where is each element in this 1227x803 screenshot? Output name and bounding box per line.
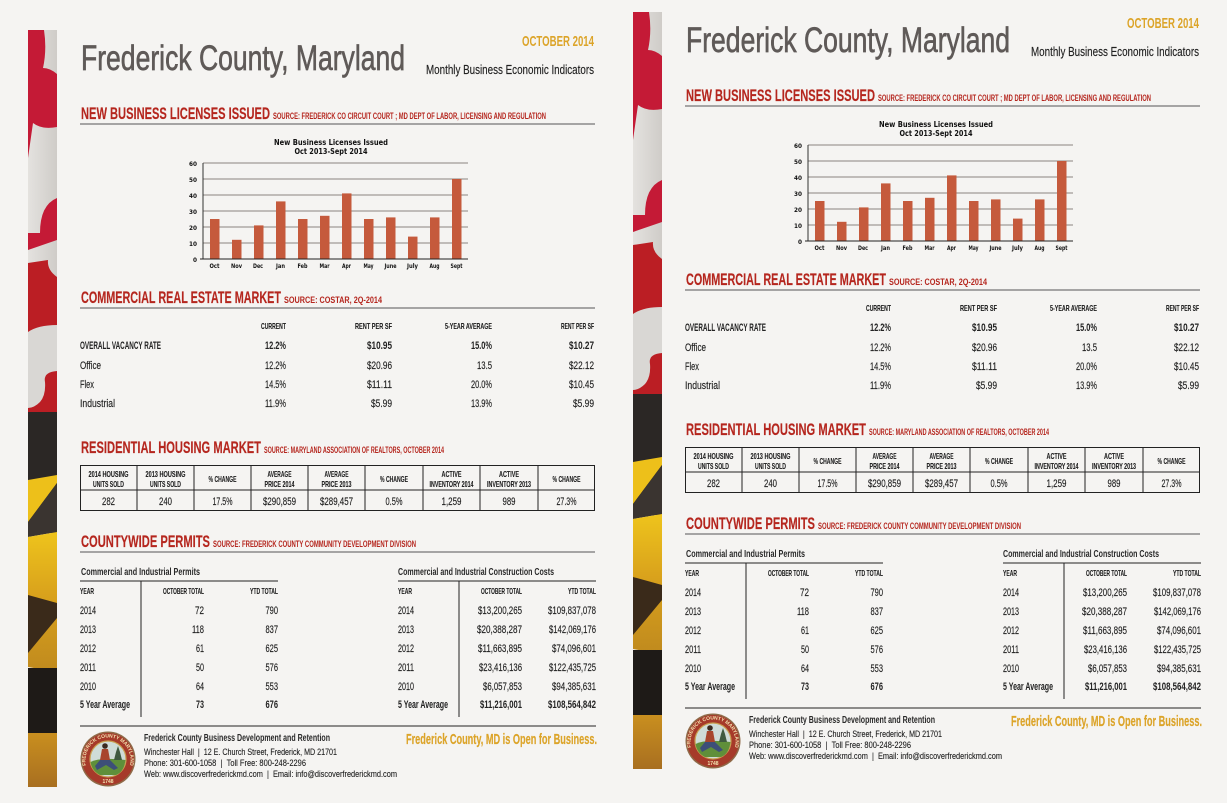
construction costs table: YTD TOTAL [568,586,596,596]
permits table: YTD TOTAL [855,568,883,578]
commercial real estate table [685,303,1199,392]
residential housing table: 17.5% [212,496,233,508]
permits table: 625 [266,643,278,655]
commercial real estate table: 11.9% [870,380,891,392]
residential housing table: AVERAGE [930,451,954,461]
footer contact details: Web: www.discoverfrederickmd.com | Email: info@discoverfrederickmd.com [749,751,1002,762]
bar chart: new business licenses: July [406,263,418,270]
construction costs table: $11,663,895 [1083,625,1127,637]
bar chart: new business licenses: 40 [794,174,802,182]
commercial real estate table: 13.5 [477,360,492,372]
permits table: 2013 [685,606,701,618]
bar chart: new business licenses: June [989,245,1002,252]
commercial real estate table: OVERALL VACANCY RATE [685,322,766,334]
bar chart: new business licenses: Aug [430,263,440,270]
icon: county seal [686,714,740,768]
construction costs table: $108,564,842 [548,699,596,711]
section heading: residential housing: RESIDENTIAL HOUSING MARKET [81,438,261,457]
bar chart: new business licenses: Oct 2013-Sept 2014 [900,129,972,138]
subtitle: Monthly Business Economic Indicators [426,62,594,77]
permits table: OCTOBER TOTAL [163,586,204,596]
construction costs table: $11,663,895 [478,643,522,655]
permits table: 5 Year Average [685,681,735,693]
residential housing table: % CHANGE [1158,456,1186,466]
commercial real estate table: 12.2% [870,342,891,354]
construction costs table: $109,837,078 [1153,587,1201,599]
residential housing table: 282 [707,478,720,490]
bar chart: new business licenses: Apr [342,263,351,270]
construction costs table: $20,388,287 [1082,606,1127,618]
residential housing table: 2013 HOUSING [750,451,791,461]
bar chart: new business licenses: Jan [275,263,285,270]
construction costs table: $13,200,265 [478,605,522,617]
commercial real estate table: $10.95 [367,340,392,352]
commercial real estate table: Office [685,342,706,354]
bar chart: new business licenses: Feb [298,263,308,270]
permits table: 2011 [80,662,96,674]
construction costs table: $94,385,631 [1157,663,1201,675]
residential housing table: 2014 HOUSING [694,451,734,461]
bar chart: new business licenses: New Business Licenses Issued [879,120,993,129]
footer contact details: Phone: 301-600-1058 | Toll Free: 800-248-2296 [749,740,911,751]
construction costs table: $11,216,001 [480,699,522,711]
section heading: residential housing: SOURCE: MARYLAND ASSOCIATION OF REALTORS, OCTOBER 2014 [264,445,444,456]
residential housing table: % CHANGE [814,456,842,466]
permits table: YEAR [685,568,699,578]
bar chart: new business licenses: Jan [880,245,890,252]
section heading: countywide permits [685,514,1200,534]
commercial real estate table: 20.0% [1076,361,1097,373]
residential housing table: PRICE 2013 [926,461,957,471]
residential housing table: PRICE 2014 [264,479,295,489]
commercial real estate table: 5-YEAR AVERAGE [445,321,492,331]
commercial real estate table: OVERALL VACANCY RATE [80,340,161,352]
commercial real estate table [80,321,594,410]
residential housing table: 1,259 [1046,478,1066,490]
residential housing table: % CHANGE [380,474,408,484]
commercial real estate table: $22.12 [569,360,594,372]
residential housing table: $289,457 [925,478,958,490]
commercial real estate table: 15.0% [471,340,492,352]
construction costs table: $142,069,176 [1154,606,1201,618]
icon: county seal [80,732,136,786]
bar chart: new business licenses: Mar [320,263,330,270]
bar chart: new business licenses: Mar [924,245,935,252]
construction costs table: 5 Year Average [1003,681,1053,693]
permits table: 553 [870,663,883,675]
permits table: 625 [870,625,883,637]
residential housing table: $290,859 [868,478,901,490]
bar chart: new business licenses: 10 [794,222,802,230]
permits table: 553 [266,681,278,693]
permits table: YEAR [80,586,94,596]
residential housing table: INVENTORY 2014 [430,479,474,489]
page: left report [28,30,597,787]
section heading: new business licenses: NEW BUSINESS LICENSES ISSUED [81,104,270,123]
commercial real estate table: 20.0% [471,379,492,391]
residential housing table: ACTIVE [1104,451,1124,461]
commercial real estate table: 15.0% [1076,322,1097,334]
bar chart: new business licenses: May [968,245,979,252]
section heading: residential housing: RESIDENTIAL HOUSING MARKET [686,420,866,439]
bar chart: new business licenses: 40 [189,192,197,200]
permits table: Commercial and Industrial Permits [81,566,200,578]
residential housing table: 27.3% [1162,478,1182,490]
permits table [80,566,278,717]
residential housing table: 240 [764,478,777,490]
permits table: 72 [195,605,204,617]
bar chart: new business licenses: Sept [450,263,463,270]
permits table: 2012 [685,625,701,637]
residential housing table: 282 [102,496,115,508]
title: Frederick County, Maryland [81,39,405,78]
residential housing table: UNITS SOLD [150,479,181,489]
commercial real estate table: 5-YEAR AVERAGE [1050,303,1097,313]
construction costs table: $94,385,631 [552,681,596,693]
permits table: 2014 [80,605,96,617]
commercial real estate table: $5.99 [573,398,594,410]
permits table: 64 [801,663,809,675]
permits table: 790 [870,587,883,599]
residential housing table: $290,859 [263,496,296,508]
residential housing table: PRICE 2014 [870,461,900,471]
commercial real estate table: 12.2% [265,360,286,372]
bar chart: new business licenses: 0 [798,238,802,246]
section heading: commercial real estate [685,270,1200,290]
commercial real estate table: $20.96 [367,360,392,372]
bar chart: new business licenses [189,138,468,270]
bar chart: new business licenses: July [1011,245,1023,252]
construction costs table: 2014 [398,605,414,617]
bar chart: new business licenses: Dec [858,245,868,252]
commercial real estate table: 12.2% [870,322,891,334]
permits table: 50 [196,662,204,674]
permits table: 2010 [685,663,701,675]
construction costs table [1003,548,1201,699]
footer contact details: Phone: 301-600-1058 | Toll Free: 800-248-2296 [144,758,306,769]
permits table: YTD TOTAL [250,586,278,596]
commercial real estate table: RENT PER SF [561,321,594,331]
section heading: new business licenses [80,104,595,124]
icon: county seal: FREDERICK COUNTY MARYLAND [687,716,739,748]
residential housing table: % CHANGE [552,474,581,484]
residential housing table: $289,457 [320,496,353,508]
bar chart: new business licenses: 20 [794,206,802,214]
construction costs table: Commercial and Industrial Construction Costs [398,566,554,578]
bar chart: new business licenses: Sept [1056,245,1068,252]
residential housing table: 17.5% [818,478,838,490]
residential housing table: 27.3% [556,496,577,508]
residential housing table: INVENTORY 2013 [487,479,531,489]
permits table: 72 [800,587,809,599]
footer contact details: Winchester Hall | 12 E. Church Street, Frederick, MD 21701 [144,747,337,758]
construction costs table: 2014 [1003,587,1019,599]
permits table: 61 [196,643,204,655]
commercial real estate table: $5.99 [976,380,997,392]
commercial real estate table: RENT PER SF [960,303,997,313]
date: OCTOBER 2014 [522,33,594,50]
construction costs table: $109,837,078 [548,605,596,617]
permits table: 118 [797,606,809,618]
section heading: countywide permits: COUNTYWIDE PERMITS [81,532,210,551]
construction costs table: $20,388,287 [477,624,522,636]
bar chart: new business licenses: 30 [794,190,802,198]
section heading: commercial real estate: SOURCE: COSTAR, 2Q-2014 [889,277,988,288]
bar chart: new business licenses: 0 [193,256,197,264]
slogan: Frederick County, MD is Open for Business. [406,731,597,748]
section heading: countywide permits: SOURCE: FREDERICK COUNTY COMMUNITY DEVELOPMENT DIVISION [818,521,1021,532]
flag strip [633,12,662,769]
construction costs table: 2010 [1003,663,1019,675]
construction costs table: $23,416,136 [479,662,522,674]
construction costs table: $122,435,725 [549,662,596,674]
footer contact details: Frederick County Business Development and Retention [749,715,935,726]
bar chart: new business licenses: May [364,263,374,270]
residential housing table: AVERAGE [324,469,349,479]
residential housing table [685,447,1200,492]
commercial real estate table: $11.11 [367,379,392,391]
permits table: 676 [870,681,883,693]
footer contact details [144,733,397,780]
construction costs table: YTD TOTAL [1173,568,1201,578]
construction costs table: $74,096,601 [1157,625,1201,637]
section heading: commercial real estate: SOURCE: COSTAR, 2Q-2014 [284,295,383,306]
commercial real estate table: $20.96 [972,342,997,354]
residential housing table: UNITS SOLD [755,461,786,471]
bar chart: new business licenses: Oct 2013-Sept 2014 [294,147,368,156]
permits table: 2011 [685,644,701,656]
icon: county seal: FREDERICK COUNTY MARYLAND [82,734,134,766]
construction costs table: OCTOBER TOTAL [1086,568,1127,578]
permits table: 73 [801,681,809,693]
footer contact details: Web: www.discoverfrederickmd.com | Email: info@discoverfrederickmd.com [144,769,397,780]
permits table: 576 [266,662,278,674]
section heading: commercial real estate [80,288,595,308]
construction costs table: $6,057,853 [483,681,522,693]
residential housing table: ACTIVE [1046,451,1067,461]
residential housing table: INVENTORY 2014 [1034,461,1079,471]
permits table: 2013 [80,624,96,636]
residential housing table: UNITS SOLD [698,461,729,471]
residential housing table [80,465,595,510]
construction costs table: $108,564,842 [1153,681,1201,693]
residential housing table: ACTIVE [499,469,519,479]
residential housing table: 1,259 [442,496,462,508]
residential housing table: AVERAGE [268,469,292,479]
construction costs table: $122,435,725 [1154,644,1201,656]
bar chart: new business licenses: Apr [947,245,956,252]
permits table: 61 [801,625,809,637]
bar chart: new business licenses: 30 [189,208,197,216]
commercial real estate table: 13.5 [1082,342,1097,354]
residential housing table: 989 [1108,478,1120,490]
section heading: new business licenses: NEW BUSINESS LICENSES ISSUED [686,86,875,105]
permits table: 837 [266,624,278,636]
commercial real estate table: $10.27 [1174,322,1199,334]
bar chart: new business licenses: Dec [253,263,263,270]
commercial real estate table: 14.5% [870,361,891,373]
permits table: 5 Year Average [80,699,130,711]
residential housing table: 0.5% [386,496,403,508]
residential housing table: 2013 HOUSING [146,469,186,479]
construction costs table: YEAR [1003,568,1017,578]
permits table: 2010 [80,681,96,693]
commercial real estate table: Flex [685,361,699,373]
section heading: new business licenses: SOURCE: FREDERICK CO CIRCUIT COURT ; MD DEPT OF LABOR, LICENSING AND REGULATION [273,111,546,122]
commercial real estate table: 14.5% [265,379,286,391]
permits table: Commercial and Industrial Permits [686,548,805,560]
construction costs table: 2011 [398,662,414,674]
section heading: countywide permits: SOURCE: FREDERICK COUNTY COMMUNITY DEVELOPMENT DIVISION [213,539,416,550]
commercial real estate table: Industrial [80,398,115,410]
residential housing table: 240 [159,496,172,508]
commercial real estate table: 13.9% [471,398,492,410]
bar chart: new business licenses: New Business Licenses Issued [274,138,388,147]
construction costs table: $13,200,265 [1083,587,1127,599]
residential housing table: 0.5% [990,478,1008,490]
bar chart: new business licenses [794,120,1073,252]
construction costs table: 2011 [1003,644,1019,656]
permits table [685,548,883,699]
construction costs table: $23,416,136 [1084,644,1127,656]
bar chart: new business licenses: Aug [1034,245,1044,252]
construction costs table: OCTOBER TOTAL [481,586,522,596]
commercial real estate table: 12.2% [265,340,286,352]
permits table: 576 [870,644,883,656]
commercial real estate table: Flex [80,379,94,391]
residential housing table: INVENTORY 2013 [1092,461,1136,471]
commercial real estate table: CURRENT [866,303,891,313]
commercial real estate table: Industrial [685,380,720,392]
commercial real estate table: Office [80,360,101,372]
bar chart: new business licenses: Nov [231,263,242,270]
permits table: 2012 [80,643,96,655]
construction costs table: $11,216,001 [1085,681,1127,693]
permits table: 118 [192,624,204,636]
permits table: 64 [196,681,204,693]
footer contact details: Winchester Hall | 12 E. Church Street, Frederick, MD 21701 [749,729,942,740]
construction costs table: 2013 [1003,606,1019,618]
bar chart: new business licenses: 10 [189,240,197,248]
footer contact details: Frederick County Business Development and Retention [144,733,330,744]
footer contact details [749,715,1002,762]
commercial real estate table: $5.99 [371,398,392,410]
permits table: OCTOBER TOTAL [768,568,809,578]
flag strip [28,30,57,787]
construction costs table: $74,096,601 [552,643,596,655]
commercial real estate table: CURRENT [261,321,286,331]
section heading: countywide permits: COUNTYWIDE PERMITS [686,514,815,533]
section heading: residential housing: SOURCE: MARYLAND ASSOCIATION OF REALTORS, OCTOBER 2014 [869,427,1049,438]
permits table: 50 [801,644,809,656]
residential housing table: % CHANGE [208,474,237,484]
commercial real estate table: RENT PER SF [1166,303,1199,313]
construction costs table: 2013 [398,624,414,636]
permits table: 2014 [685,587,701,599]
commercial real estate table: $10.45 [1174,361,1199,373]
construction costs table: 2012 [398,643,414,655]
residential housing table: 2014 HOUSING [88,469,129,479]
residential housing table: AVERAGE [872,451,897,461]
commercial real estate table: $11.11 [972,361,997,373]
section heading: commercial real estate: COMMERCIAL REAL ESTATE MARKET [686,270,886,289]
bar chart: new business licenses: 20 [189,224,197,232]
page: right report [633,12,1202,769]
section heading: countywide permits [80,532,595,552]
bar chart: new business licenses: 50 [794,158,802,166]
residential housing table: PRICE 2013 [322,479,352,489]
permits table: 676 [266,699,278,711]
bar chart: new business licenses: Feb [902,245,913,252]
commercial real estate table: $10.95 [972,322,997,334]
icon: county seal: 1748 [102,779,114,785]
residential housing table: % CHANGE [985,456,1013,466]
bar chart: new business licenses: 60 [794,142,802,150]
commercial real estate table: 13.9% [1076,380,1097,392]
bar chart: new business licenses: Nov [836,245,847,252]
commercial real estate table: RENT PER SF [355,321,392,331]
construction costs table: 2012 [1003,625,1019,637]
construction costs table: $6,057,853 [1088,663,1127,675]
section heading: new business licenses [685,86,1200,106]
bar chart: new business licenses: Oct [210,263,220,270]
permits table: 837 [870,606,883,618]
commercial real estate table: $10.27 [569,340,594,352]
commercial real estate table: $5.99 [1178,380,1199,392]
commercial real estate table: 11.9% [265,398,286,410]
residential housing table: 989 [502,496,516,508]
permits table: 73 [196,699,204,711]
section heading: commercial real estate: COMMERCIAL REAL ESTATE MARKET [81,288,281,307]
construction costs table: 5 Year Average [398,699,448,711]
permits table: 790 [266,605,278,617]
construction costs table: YEAR [398,586,412,596]
bar chart: new business licenses: Oct [814,245,825,252]
bar chart: new business licenses: 60 [189,160,197,168]
icon: county seal: 1748 [707,761,719,767]
bar chart: new business licenses: June [384,263,396,270]
bar chart: new business licenses: 50 [189,176,197,184]
residential housing table: UNITS SOLD [93,479,124,489]
residential housing table: ACTIVE [442,469,462,479]
construction costs table [398,566,596,717]
construction costs table: $142,069,176 [549,624,596,636]
commercial real estate table: $22.12 [1174,342,1199,354]
construction costs table: 2010 [398,681,414,693]
commercial real estate table: $10.45 [569,379,594,391]
title: Frederick County, Maryland [686,21,1010,60]
